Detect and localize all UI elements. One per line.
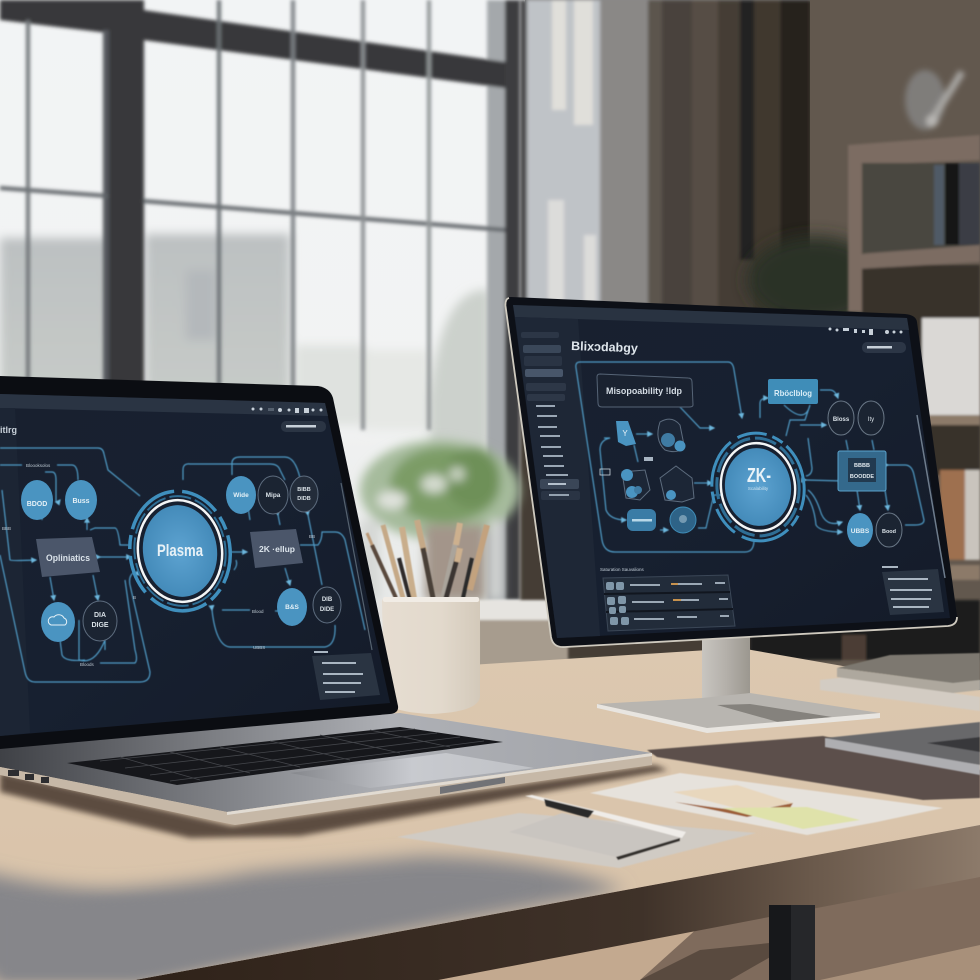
notepad — [397, 813, 756, 868]
node: Optimistic — [36, 537, 100, 577]
monitor stand — [597, 636, 880, 733]
monitor diagram connectors — [576, 362, 924, 552]
background: curtains — [520, 0, 815, 660]
circular nodes: DIDB — [297, 496, 311, 502]
circular nodes: DIDE — [320, 607, 334, 613]
circular nodes: DIGE — [91, 622, 109, 629]
circular nodes: BIBB — [297, 487, 311, 493]
nodes right of hub: Bloss — [833, 417, 850, 423]
pencils — [367, 520, 487, 600]
circular nodes: Mipa — [266, 492, 281, 499]
yellow sticky note — [722, 807, 860, 829]
monitor table panel: Saturation Sauvalions — [600, 567, 645, 572]
monitor bezel — [505, 297, 957, 647]
mug with pencils — [367, 520, 487, 714]
circular nodes: BDOD — [27, 501, 47, 508]
dark band on desk — [647, 736, 980, 800]
small diagram labels: BB — [309, 534, 315, 539]
small diagram labels: Bloods — [80, 662, 95, 667]
hub ZK — [705, 427, 811, 547]
laptop scrollbar — [341, 483, 372, 650]
screen heading: itlrg — [0, 425, 17, 435]
circular nodes — [21, 476, 341, 642]
nodes left of hub: Y — [622, 429, 628, 438]
window frame — [0, 0, 520, 600]
tablet — [825, 722, 980, 775]
small diagram labels: Bloooksolos — [26, 463, 51, 468]
small diagram labels: Blood — [252, 609, 264, 614]
nodes right of hub: BBBB — [854, 463, 870, 469]
paper sheet right — [590, 773, 943, 835]
monitor sidebar — [515, 317, 600, 638]
laptop screen — [0, 394, 390, 736]
laptop lid — [0, 376, 398, 749]
background: wall and shelves — [747, 0, 980, 680]
monitor heading: Blixɔdabgy — [571, 339, 638, 355]
circular nodes: DIA — [94, 612, 106, 619]
monitor table panel — [600, 567, 735, 631]
tan sticky note — [673, 785, 793, 811]
laptop base — [0, 713, 652, 812]
nodes right of hub: UBBS — [851, 528, 870, 535]
monitor screen — [513, 305, 950, 638]
plant behind monitor — [747, 236, 883, 324]
trackpad — [290, 753, 534, 788]
laptop connectors — [0, 448, 365, 682]
keyboard — [67, 727, 503, 785]
nodes right of hub — [828, 401, 902, 547]
nodes right of hub: Bood — [882, 529, 896, 535]
orange note edge — [675, 802, 793, 817]
desk leg — [769, 905, 815, 980]
callout: Interoperability: Misopoability !ldp — [606, 386, 682, 397]
sideboard behind desk — [378, 600, 568, 670]
circular nodes: Buss — [72, 498, 90, 505]
blurred city beyond the window — [0, 234, 490, 620]
circular nodes: Wide — [233, 492, 249, 499]
grey shadow on desk — [0, 856, 625, 980]
nodes left of hub — [600, 419, 696, 533]
small diagram labels: B — [133, 595, 136, 600]
desk top — [0, 640, 980, 980]
circular nodes: B&S — [285, 604, 300, 611]
desk — [0, 640, 980, 980]
pen — [525, 795, 686, 838]
background: window wall — [0, 0, 525, 660]
shelf ornament — [905, 70, 962, 130]
node: Optimistic: Opliniatics — [46, 553, 90, 563]
toolbar — [252, 408, 326, 432]
circular nodes: DIB — [322, 597, 333, 603]
node: ZK rollup: 2K ·ellup — [259, 544, 295, 554]
hub ZK: ZK- — [747, 465, 771, 487]
callout: Interoperability — [597, 374, 693, 407]
monitor scrollbar — [917, 415, 945, 578]
laptop ports — [8, 770, 49, 783]
monitor legend panel — [882, 566, 944, 615]
floor — [0, 830, 980, 980]
small diagram labels: UBBS — [253, 645, 265, 650]
hinge notch — [440, 777, 505, 794]
monitor top toolbar — [828, 328, 906, 353]
small diagram labels — [2, 463, 315, 667]
node: ZK rollup — [250, 529, 303, 568]
small diagram labels: BBB — [2, 526, 11, 531]
hub ZK: Scalability — [748, 486, 769, 491]
books — [820, 653, 980, 711]
hub label: Plasma — [157, 542, 204, 560]
laptop — [0, 376, 668, 838]
laptop legend panel — [312, 651, 380, 700]
node: Rollup box top — [768, 379, 818, 404]
desk front edge — [135, 825, 980, 980]
nodes right of hub: BOODDE — [850, 474, 874, 480]
hub Plasma — [122, 485, 238, 617]
monitor — [505, 297, 957, 647]
papers and pen — [397, 773, 943, 868]
laptop shadow — [0, 765, 668, 838]
nodes right of hub: Ity — [868, 417, 874, 423]
node: Rollup box top: Rböclblog — [774, 388, 812, 398]
plant — [360, 440, 520, 600]
